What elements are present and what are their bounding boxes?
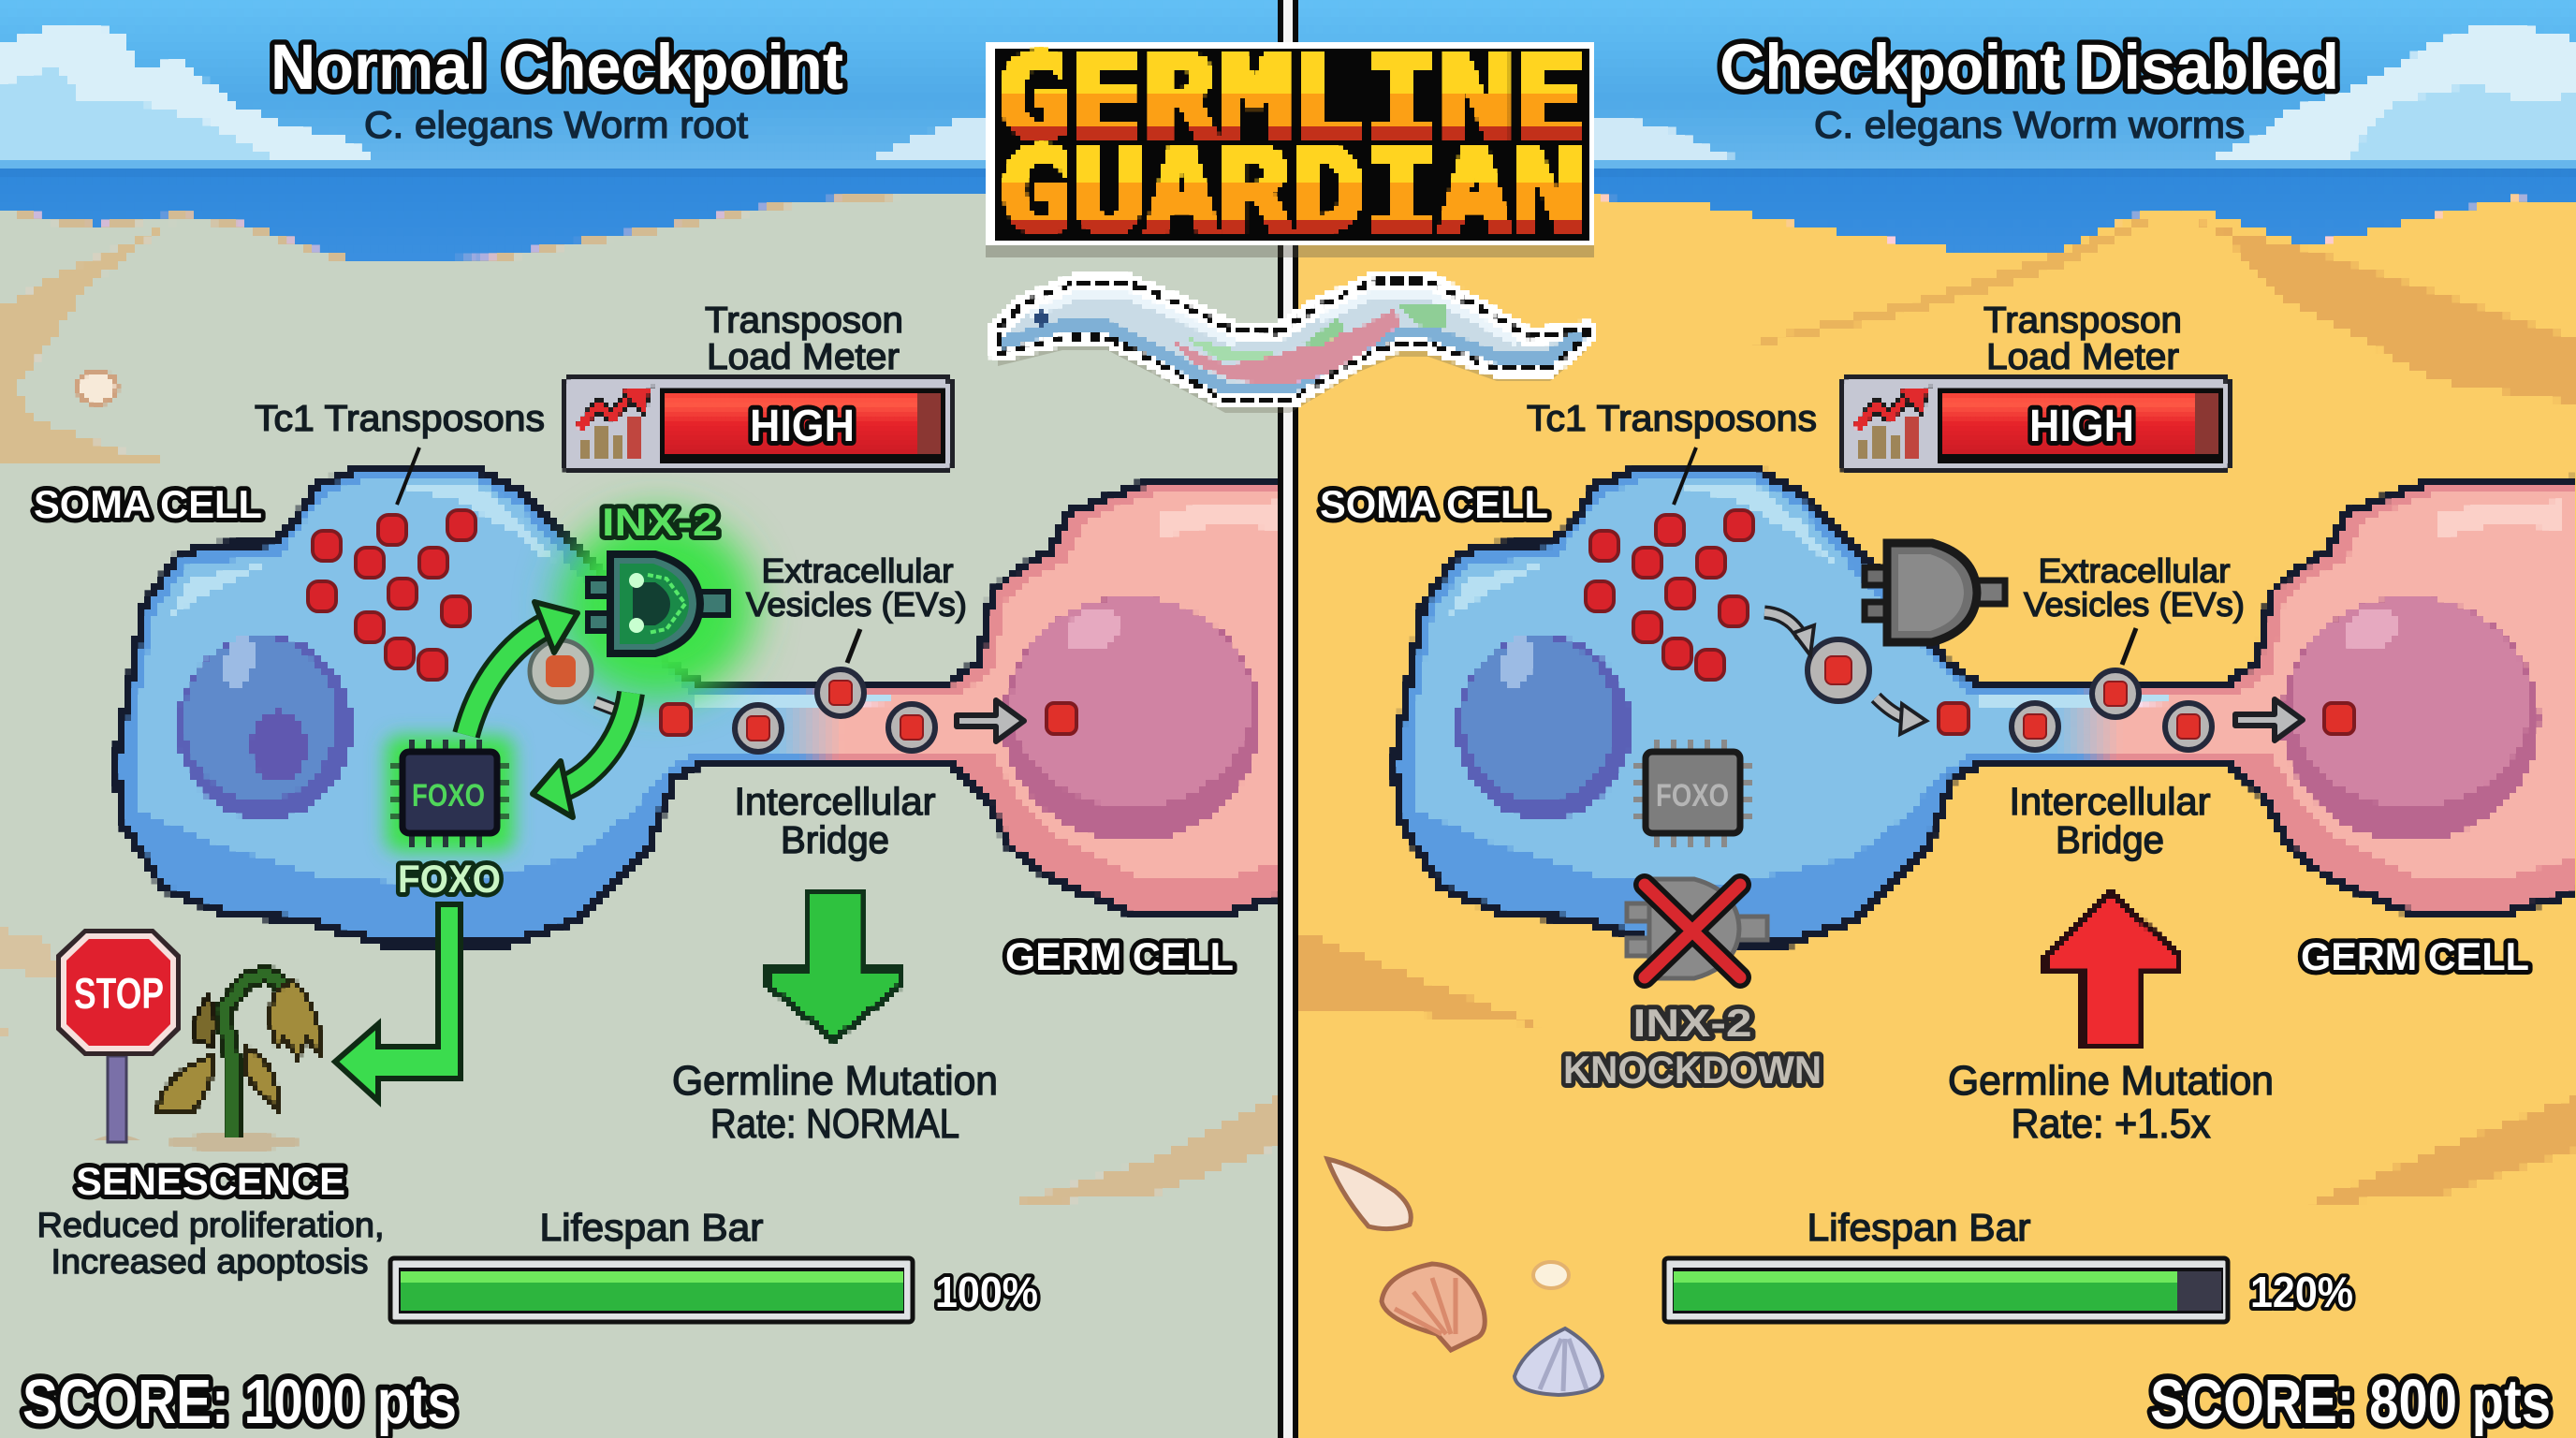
label: extracellular vesicles: Extracellular xyxy=(2039,551,2231,590)
label: germ cell: GERM CELL xyxy=(2301,934,2529,978)
label: germline mutation rate: Germline Mutation xyxy=(672,1058,998,1104)
label: soma cell: SOMA CELL xyxy=(34,482,262,526)
leader line: EVs xyxy=(847,629,860,663)
label: soma cell: SOMA CELL xyxy=(1320,482,1548,526)
heading: normal checkpoint: Normal Checkpoint xyxy=(271,31,843,103)
label: lifespan bar: Lifespan Bar xyxy=(1807,1206,2031,1249)
glow: FOXO xyxy=(386,736,514,852)
diagram: soma and germ cells connected by bridge xyxy=(115,468,1329,944)
center divider xyxy=(1278,0,1298,1438)
label: load meter: Load Meter xyxy=(707,337,900,377)
title: Germline Guardian xyxy=(986,31,1594,259)
label: senescence: SENESCENCE xyxy=(76,1159,345,1203)
right background xyxy=(1288,0,2576,1438)
label: INX-2 knockdown: INX-2 xyxy=(1632,1001,1752,1045)
icon: wilted plant xyxy=(157,974,320,1151)
meter: transposon load right xyxy=(1842,378,2229,470)
glow: INX-2 xyxy=(559,513,755,700)
label: extracellular vesicles: Vesicles (EVs) xyxy=(746,585,967,624)
label: Tc1 transposons: Tc1 Transposons xyxy=(1527,399,1817,439)
subheading: C. elegans Worm worms xyxy=(1814,105,2245,146)
extracellular vesicles and grey arrows xyxy=(1764,612,2354,750)
label: intercellular bridge: Intercellular xyxy=(734,780,936,823)
label: intercellular bridge: Intercellular xyxy=(2009,780,2211,823)
bar: lifespan 120 percent xyxy=(1664,1258,2228,1322)
arrow: mutation rate down green xyxy=(768,891,901,1040)
Tc1 transposon dots xyxy=(1586,510,1753,680)
sign text: STOP: STOP xyxy=(74,969,164,1018)
title: Germline Guardian: GERMLINE xyxy=(996,31,1588,166)
label: intercellular bridge: Bridge xyxy=(2056,818,2164,861)
icon: transparent C. elegans worm xyxy=(998,281,1587,413)
extracellular vesicles and flow arrow xyxy=(530,640,1076,752)
label: extracellular vesicles: Extracellular xyxy=(762,551,954,590)
chip text: FOXO: FOXO xyxy=(412,778,485,814)
shell: small left shell xyxy=(78,372,117,404)
panel: left normal checkpoint xyxy=(0,0,1329,1438)
icon: knocked down INX-2 with red X xyxy=(1627,879,1767,978)
left background xyxy=(0,0,1288,1438)
heading: checkpoint disabled: Checkpoint Disabled xyxy=(1720,31,2339,103)
arrow: mutation rate up red xyxy=(2045,891,2179,1047)
value: 120 percent: 120% xyxy=(2250,1268,2353,1316)
label: FOXO: FOXO xyxy=(398,857,501,901)
arrow: FOXO up to INX-2 xyxy=(466,602,578,735)
label: germline mutation rate: Rate: +1.5x xyxy=(2011,1101,2211,1147)
label: extracellular vesicles xyxy=(746,551,967,624)
label: load meter: Transposon xyxy=(705,301,903,341)
leader line: EVs xyxy=(2122,628,2136,665)
label: extracellular vesicles xyxy=(2024,551,2245,624)
diagram: soma and germ cells connected by bridge xyxy=(1394,468,2576,944)
Tc1 transposon dots xyxy=(308,510,476,680)
label: extracellular vesicles: Vesicles (EVs) xyxy=(2024,585,2245,624)
label: germline mutation rate xyxy=(1948,1058,2274,1147)
score left: SCORE: 1000 pts xyxy=(22,1367,457,1437)
leader line: Tc1 xyxy=(1674,448,1696,505)
label: germline mutation rate: Rate: NORMAL xyxy=(710,1101,959,1147)
label: load meter xyxy=(705,301,903,377)
label: load meter: Transposon xyxy=(1983,301,2182,341)
icon: FOXO chip disabled xyxy=(1633,740,1752,847)
bar: lifespan 100 percent xyxy=(390,1258,913,1322)
icon: stop sign xyxy=(56,929,181,1142)
title: Germline Guardian: GUARDIAN xyxy=(999,125,1585,259)
arrow: INX-2 back to FOXO xyxy=(533,693,631,817)
icon: INX-2 plug disabled xyxy=(1865,543,2005,642)
subheading: C. elegans Worm root xyxy=(364,105,748,146)
label: germline mutation rate xyxy=(672,1058,998,1147)
label: load meter xyxy=(1983,301,2182,377)
arrow: FOXO to senescence xyxy=(335,904,461,1101)
label: load meter: Load Meter xyxy=(1986,337,2179,377)
value: HIGH: HIGH xyxy=(2029,402,2134,451)
label: intercellular bridge xyxy=(2009,780,2211,861)
panel: right checkpoint disabled xyxy=(1288,0,2576,1438)
value: HIGH: HIGH xyxy=(750,402,855,451)
label: INX-2: INX-2 xyxy=(602,500,718,544)
icon: FOXO chip active xyxy=(390,740,509,847)
label: germ cell: GERM CELL xyxy=(1005,934,1234,978)
icon: INX-2 gap junction plug active xyxy=(588,554,728,653)
label: germline mutation rate: Germline Mutation xyxy=(1948,1058,2274,1104)
text: senescence details: Reduced proliferation, xyxy=(37,1206,385,1244)
value: 100 percent: 100% xyxy=(935,1268,1038,1316)
meter: transposon load left xyxy=(564,378,951,470)
label: INX-2 knockdown xyxy=(1563,1001,1822,1092)
label: INX-2 knockdown: KNOCKDOWN xyxy=(1563,1048,1822,1092)
label: Tc1 transposons: Tc1 Transposons xyxy=(255,399,545,439)
chip text: FOXO: FOXO xyxy=(1656,778,1729,814)
label: intercellular bridge xyxy=(734,780,936,861)
text: senescence details: Increased apoptosis xyxy=(51,1242,369,1281)
leader line: Tc1 xyxy=(397,448,419,505)
label: lifespan bar: Lifespan Bar xyxy=(539,1206,764,1249)
label: intercellular bridge: Bridge xyxy=(781,818,889,861)
shells decoration xyxy=(1327,1159,1603,1395)
text: senescence details xyxy=(37,1206,385,1281)
